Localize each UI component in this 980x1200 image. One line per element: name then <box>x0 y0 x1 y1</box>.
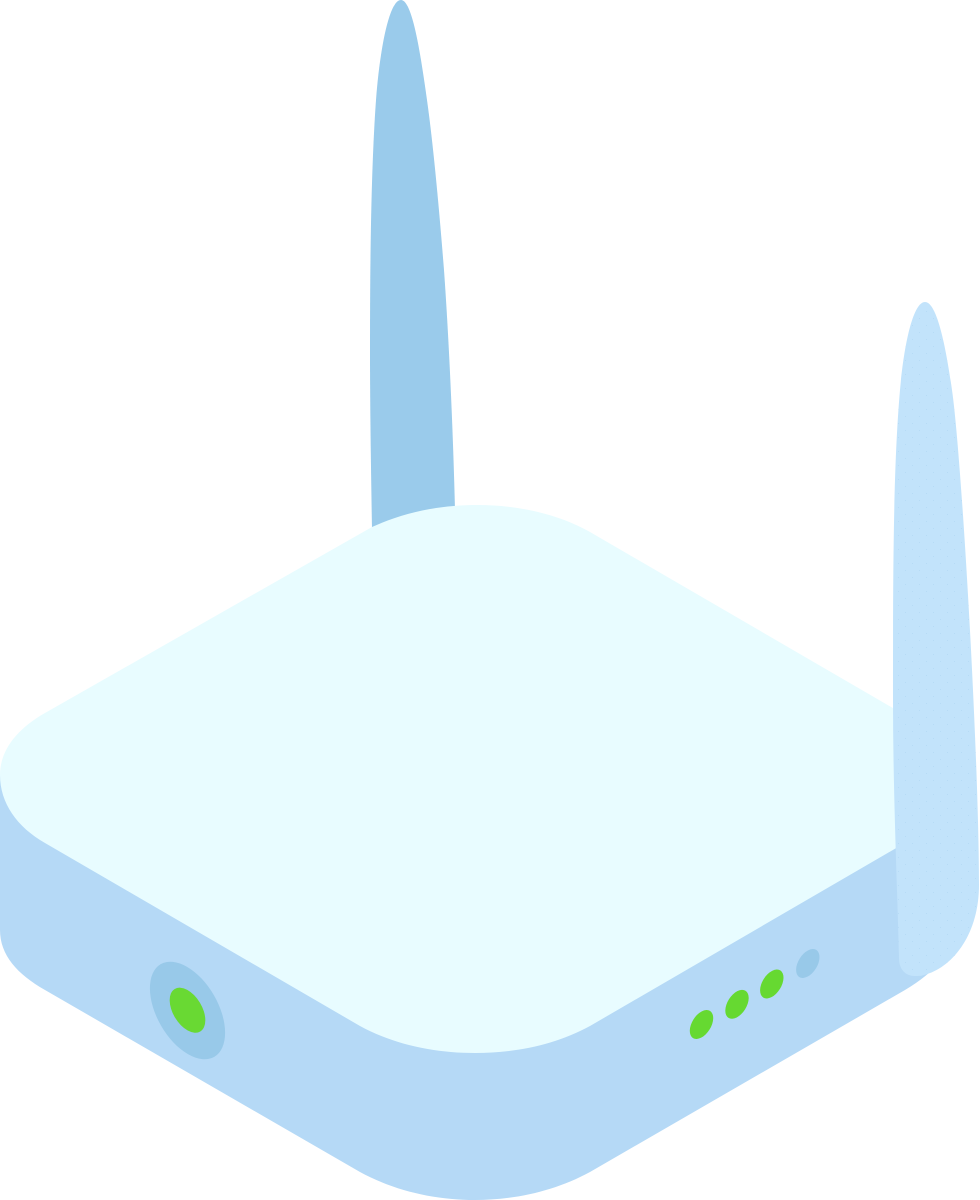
green light 1 <box>685 1006 718 1043</box>
back antenna <box>370 0 455 530</box>
blue light <box>791 945 824 982</box>
status lights <box>685 945 824 1043</box>
green light 3 <box>755 965 788 1003</box>
power button <box>134 949 241 1072</box>
router body side <box>0 775 956 1200</box>
button green light <box>162 981 213 1039</box>
button outer ring <box>134 949 241 1072</box>
router top face <box>0 505 956 1053</box>
front antenna <box>893 302 979 976</box>
green light 2 <box>720 986 754 1023</box>
